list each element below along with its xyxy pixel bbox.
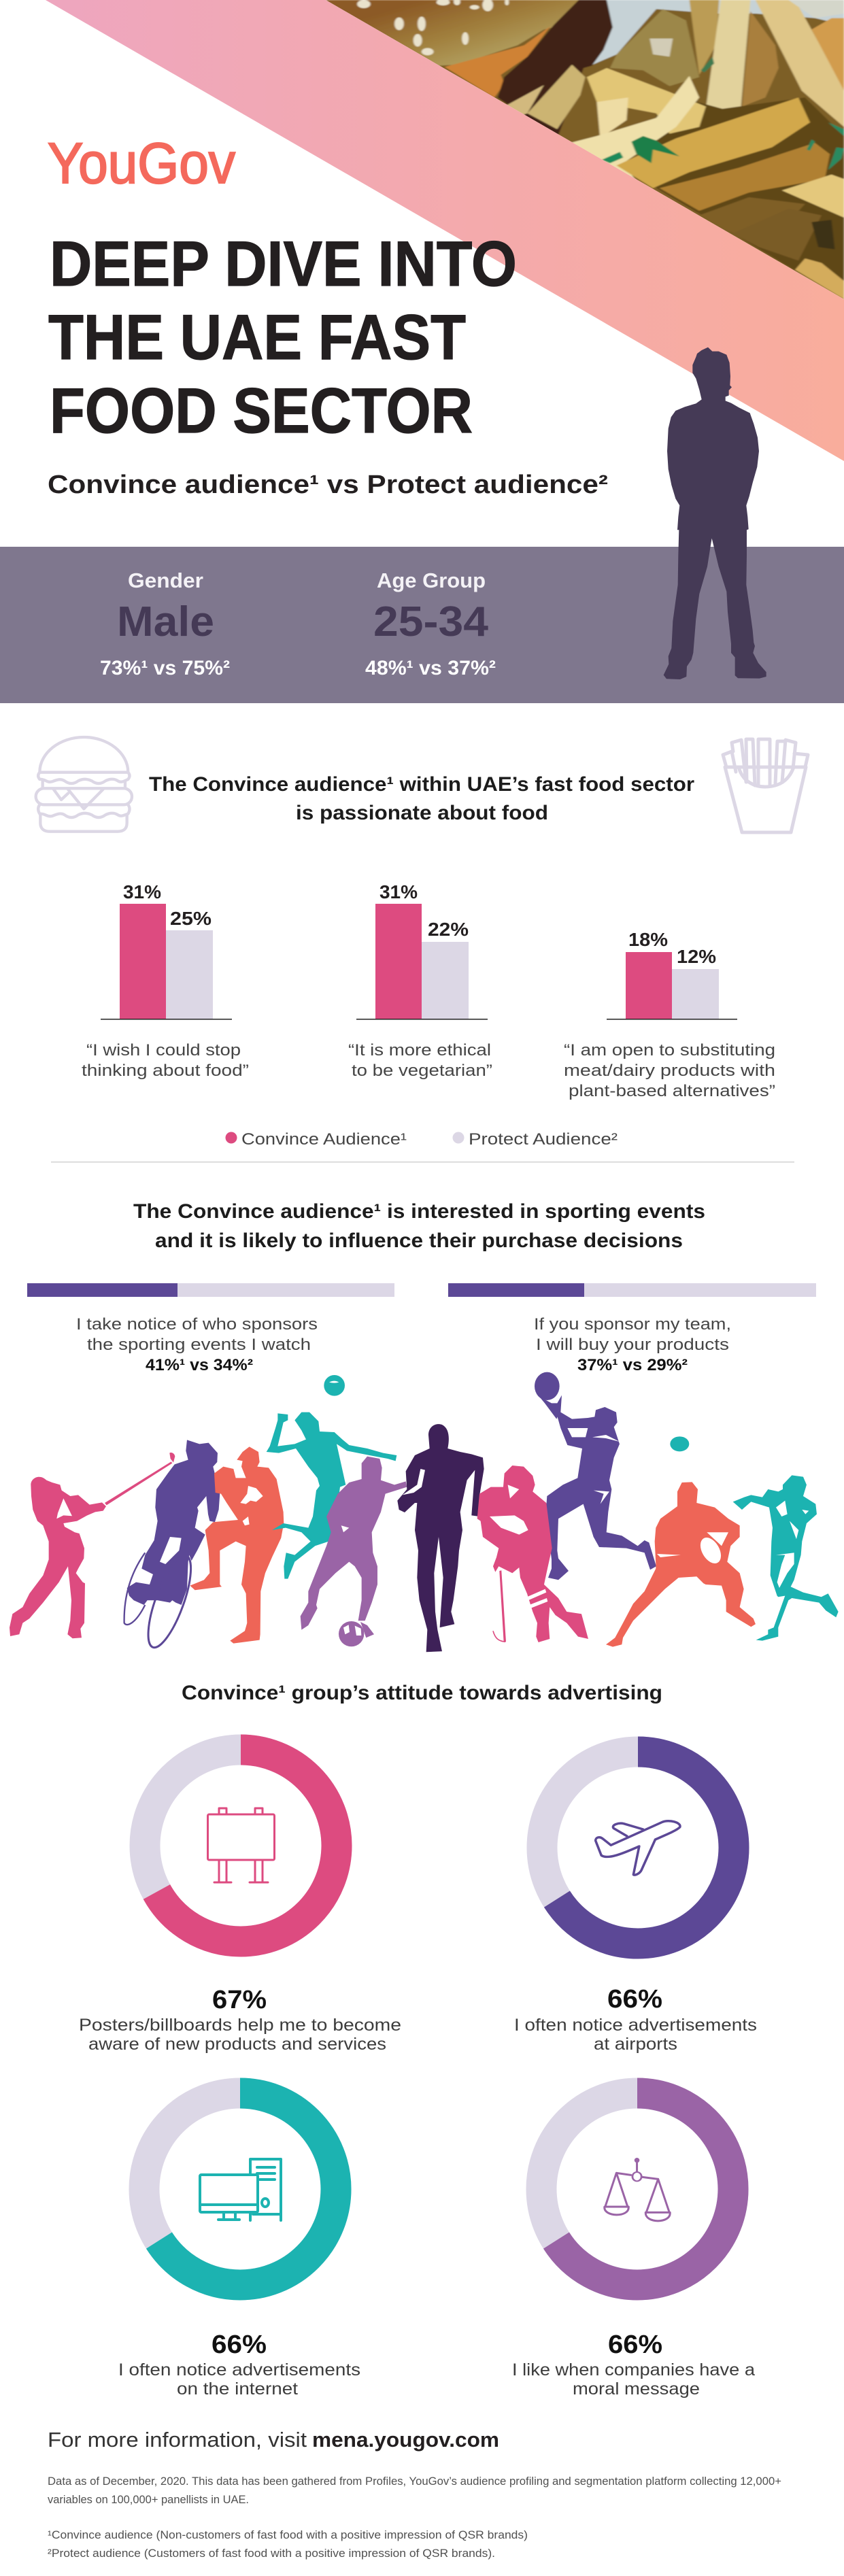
progress stat: sponsor my team: I will buy your products	[536, 1336, 729, 1354]
diagonal pink band	[46, 0, 844, 461]
donut panel: airports: I often notice advertisements	[514, 2016, 757, 2035]
donut chart 66% moral	[541, 2093, 733, 2285]
bar chart: open to substituting: 18%	[628, 929, 668, 950]
donut panel: posters and billboards: aware of new products and services	[88, 2035, 386, 2054]
bar chart: more ethical to be vegetarian: 22%	[428, 919, 469, 940]
icon: desktop computer	[200, 2159, 281, 2220]
chart legend	[226, 1130, 618, 1149]
progress stat: sponsors of sporting events	[27, 1283, 394, 1374]
icon: burger	[36, 737, 132, 832]
athlete: baseball pitcher	[190, 1446, 284, 1644]
footnotes: ¹Convince audience (Non-customers of fast food with a positive impression of QSR brands)	[48, 2528, 528, 2541]
donut panel: moral message: moral message	[573, 2379, 700, 2399]
bar chart: more ethical to be vegetarian	[348, 881, 492, 1080]
bar chart: open to substituting: plant-based alternatives”	[569, 1082, 775, 1100]
donut panel: internet: 66%	[212, 2331, 267, 2359]
donut panel: moral message: I like when companies have a	[512, 2360, 755, 2379]
icon: balance scales	[605, 2158, 670, 2221]
footer call to action: mena.yougov.com	[312, 2428, 499, 2452]
footnotes: variables on 100,000+ panellists in UAE.	[48, 2493, 249, 2506]
heading: attitude towards advertising: Convince¹ group’s attitude towards advertising	[182, 1682, 662, 1704]
bar chart: I wish I could stop: “I wish I could stop	[86, 1041, 241, 1060]
heading: sporting events	[133, 1200, 705, 1252]
athlete: volleyball player and ball	[267, 1375, 396, 1579]
icon: fries	[723, 739, 808, 832]
illustration: athletes silhouettes	[10, 1372, 839, 1652]
progress stat: sponsors of sporting events: 41%¹ vs 34%²	[146, 1356, 253, 1374]
donut panel: moral message: 66%	[608, 2331, 662, 2359]
bar chart: open to substituting	[564, 929, 775, 1100]
gender stat	[100, 569, 230, 679]
athlete: rugby player	[606, 1482, 756, 1647]
athlete: cyclist	[124, 1440, 220, 1652]
donut chart 66% airports	[542, 1752, 734, 1944]
athlete: golfer	[10, 1453, 175, 1638]
athlete: basketball jumper and ball	[535, 1372, 656, 1580]
footnotes	[48, 2475, 781, 2560]
subtitle: Convince audience¹ vs Protect audience²	[48, 471, 608, 499]
demographics band	[0, 547, 844, 703]
donut chart 67%	[145, 1750, 337, 1942]
donut chart 66% internet	[144, 2093, 336, 2285]
bar chart: open to substituting: “I am open to substituting	[564, 1041, 775, 1060]
bar chart: more ethical to be vegetarian: to be vegetarian”	[352, 1062, 492, 1080]
heading: sporting events: The Convince audience¹ is interested in sporting events	[133, 1200, 705, 1223]
gender stat: Male	[117, 598, 214, 645]
age group stat: 48%¹ vs 37%²	[365, 657, 496, 679]
heading: passionate about food: is passionate about food	[296, 802, 548, 824]
donut panel: airports	[514, 1752, 757, 2054]
progress stat: sponsors of sporting events: I take notice of who sponsors	[76, 1315, 318, 1334]
donut panel: moral message	[512, 2093, 755, 2399]
icon: billboard	[208, 1808, 275, 1882]
age group stat: Age Group	[377, 569, 486, 592]
chart legend: Protect Audience²	[469, 1130, 618, 1149]
bar chart: I wish I could stop: 25%	[170, 908, 212, 929]
heading: passionate about food	[149, 773, 694, 824]
title: DEEP DIVE INTO	[50, 228, 517, 299]
heading: sporting events: and it is likely to influence their purchase decisions	[155, 1230, 683, 1252]
progress stat: sponsors of sporting events: the sporting events I watch	[87, 1336, 311, 1354]
bar chart: open to substituting: meat/dairy products with	[564, 1062, 775, 1080]
donut panel: internet: on the internet	[177, 2379, 298, 2399]
gender stat: 73%¹ vs 75%²	[100, 657, 230, 679]
footer call to action: For more information, visit	[48, 2428, 307, 2452]
footer call to action	[48, 2428, 499, 2452]
progress stat: sponsor my team: If you sponsor my team,	[534, 1315, 731, 1334]
footnotes: ²Protect audience (Customers of fast food with a positive impression of QSR brands).	[48, 2547, 495, 2560]
athlete: hockey player	[477, 1465, 588, 1642]
donut panel: internet	[118, 2093, 360, 2399]
bar chart: more ethical to be vegetarian: “It is more ethical	[348, 1041, 491, 1060]
bar chart: more ethical to be vegetarian: 31%	[379, 881, 418, 902]
footnotes: Data as of December, 2020. This data has been gathered from Profiles, YouGov’s audience profiling and segmentation platform collecting 12,000+	[48, 2475, 781, 2488]
chart legend: Convince Audience¹	[241, 1130, 407, 1149]
athlete: runner	[397, 1424, 484, 1652]
athlete: american football player and ball	[670, 1436, 839, 1641]
bar chart: I wish I could stop	[82, 881, 249, 1080]
bar chart: I wish I could stop: thinking about food”	[82, 1062, 249, 1080]
donut panel: posters and billboards	[79, 1750, 401, 2054]
bar chart: I wish I could stop: 31%	[123, 881, 161, 902]
title: THE UAE FAST	[48, 301, 466, 373]
gender stat: Gender	[128, 569, 203, 592]
bar chart: open to substituting: 12%	[677, 946, 716, 967]
age group stat: 25-34	[373, 598, 489, 645]
donut panel: internet: I often notice advertisements	[118, 2360, 360, 2379]
donut panel: posters and billboards: Posters/billboards help me to become	[79, 2016, 401, 2035]
age group stat	[365, 569, 496, 679]
heading: passionate about food: The Convince audience¹ within UAE’s fast food sector	[149, 773, 694, 796]
icon: airplane	[596, 1821, 680, 1875]
athlete: soccer player and ball	[301, 1457, 407, 1646]
progress stat: sponsor my team	[448, 1283, 816, 1374]
title	[48, 228, 517, 446]
progress stat: sponsor my team: 37%¹ vs 29%²	[577, 1356, 688, 1374]
logo: YouGov: YouGov	[48, 131, 235, 195]
donut panel: airports: 66%	[607, 1985, 662, 2014]
donut panel: posters and billboards: 67%	[212, 1986, 267, 2014]
title: FOOD SECTOR	[50, 375, 473, 446]
donut panel: airports: at airports	[594, 2035, 677, 2054]
icon: standing person silhouette	[664, 348, 766, 679]
header photo: burger and fries	[326, 0, 844, 299]
